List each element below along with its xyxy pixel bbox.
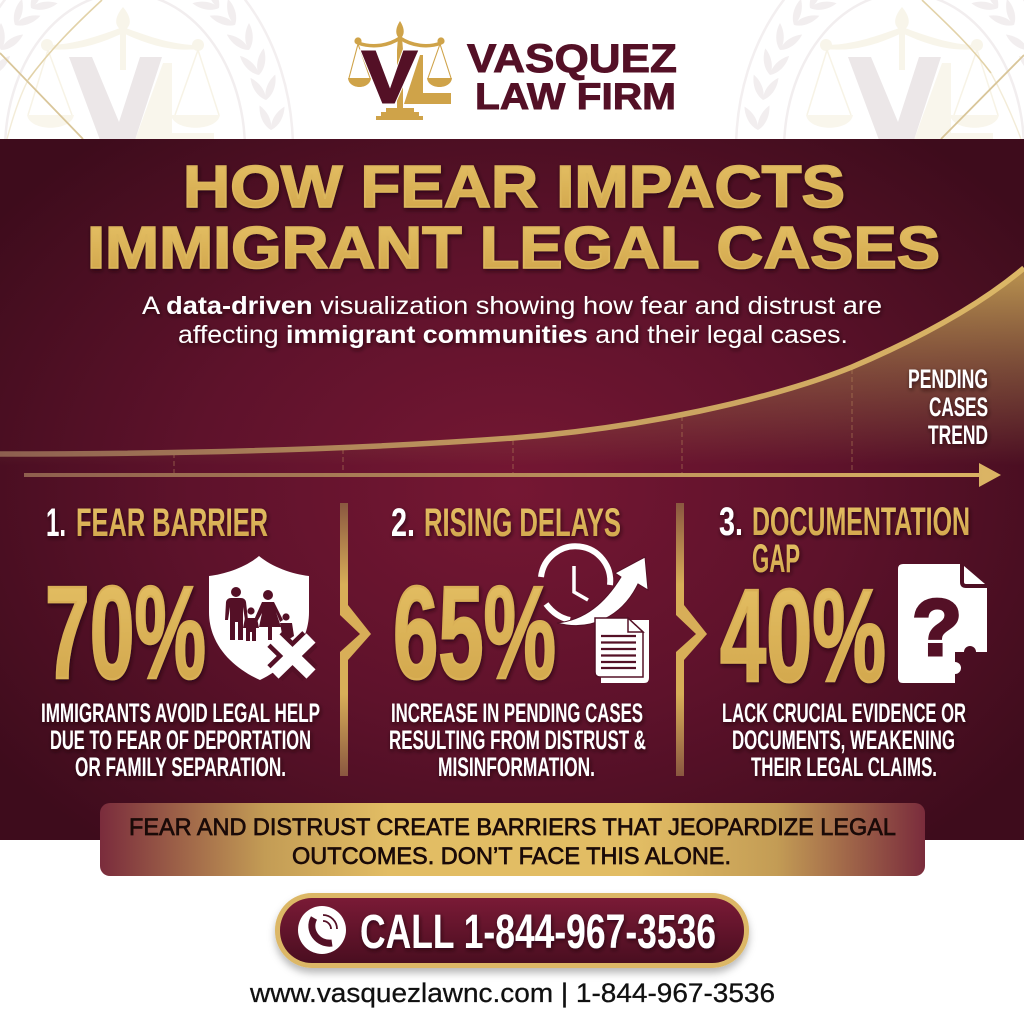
icon: family shield with X — [209, 556, 311, 680]
label: pending cases trend: TREND — [928, 420, 988, 450]
description: documentation gap — [722, 698, 966, 782]
callout: FEAR AND DISTRUST CREATE BARRIERS THAT JEOPARDIZE LEGAL — [129, 814, 896, 841]
callout — [100, 803, 925, 876]
heading: documentation gap: GAP — [752, 537, 800, 581]
time axis arrow — [24, 463, 1001, 487]
icon: clock and rising arrow — [541, 546, 648, 626]
description: rising delays: INCREASE IN PENDING CASES — [391, 698, 643, 728]
heading: fear barrier: FEAR BARRIER — [76, 501, 268, 545]
title: IMMIGRANT LEGAL CASES — [87, 215, 940, 281]
subtitle: A data-driven visualization showing how fear and distrust are — [142, 292, 882, 320]
panel: rising delays — [389, 501, 649, 782]
stat: 70%: 70% — [45, 559, 206, 706]
icon: phone — [298, 906, 346, 954]
heading: rising delays: RISING DELAYS — [424, 501, 621, 545]
divider arrow 1 — [340, 503, 371, 776]
logo wordmark: VASQUEZ: VASQUEZ — [467, 37, 677, 81]
pending cases trend chart — [0, 268, 1024, 487]
header background — [0, 0, 1024, 140]
heading: fear barrier: 1. — [46, 501, 66, 545]
label: pending cases trend — [908, 364, 988, 450]
call button — [275, 893, 749, 968]
icon: document — [595, 618, 649, 683]
description: fear barrier: IMMIGRANTS AVOID LEGAL HELP — [41, 698, 320, 728]
description: rising delays: MISINFORMATION. — [438, 752, 595, 782]
maroon main panel — [0, 139, 1024, 840]
label: pending cases trend: CASES — [929, 392, 988, 422]
heading: documentation gap — [719, 500, 970, 581]
title: HOW FEAR IMPACTS — [183, 154, 845, 220]
icon: scales of justice with VL monogram — [348, 21, 452, 120]
heading: rising delays: 2. — [391, 501, 415, 545]
logo — [348, 21, 677, 120]
stat: 65%: 65% — [393, 559, 556, 706]
description: fear barrier — [41, 698, 320, 782]
footer contact line: www.vasquezlawnc.com | 1-844-967-3536 — [249, 978, 775, 1008]
divider arrow 2 — [676, 503, 707, 776]
heading: rising delays — [391, 501, 621, 545]
stat: 40%: 40% — [720, 562, 886, 709]
panel: fear barrier — [41, 501, 320, 782]
trend curve — [0, 268, 1024, 454]
description: fear barrier: DUE TO FEAR OF DEPORTATION — [50, 725, 311, 755]
subtitle — [142, 292, 882, 349]
callout: OUTCOMES. DON’T FACE THIS ALONE. — [292, 843, 731, 870]
button label: CALL 1-844-967-3536 — [360, 906, 716, 959]
panel: documentation gap — [719, 500, 987, 782]
subtitle: affecting immigrant communities and their legal cases. — [178, 321, 848, 349]
description: rising delays — [389, 698, 646, 782]
description: fear barrier: OR FAMILY SEPARATION. — [75, 752, 286, 782]
heading: fear barrier — [46, 501, 268, 545]
icon: document with question mark and puzzle piece: ? — [912, 583, 962, 672]
area under trend curve — [0, 270, 1024, 472]
watermark: right crest — [736, 0, 1024, 365]
logo wordmark: LAW FIRM: LAW FIRM — [475, 76, 676, 117]
title — [87, 154, 940, 281]
watermark: left crest — [0, 0, 293, 365]
description: rising delays: RESULTING FROM DISTRUST & — [389, 725, 646, 755]
icon: document with question mark and puzzle piece — [898, 564, 987, 683]
heading: documentation gap: 3. — [719, 500, 743, 544]
